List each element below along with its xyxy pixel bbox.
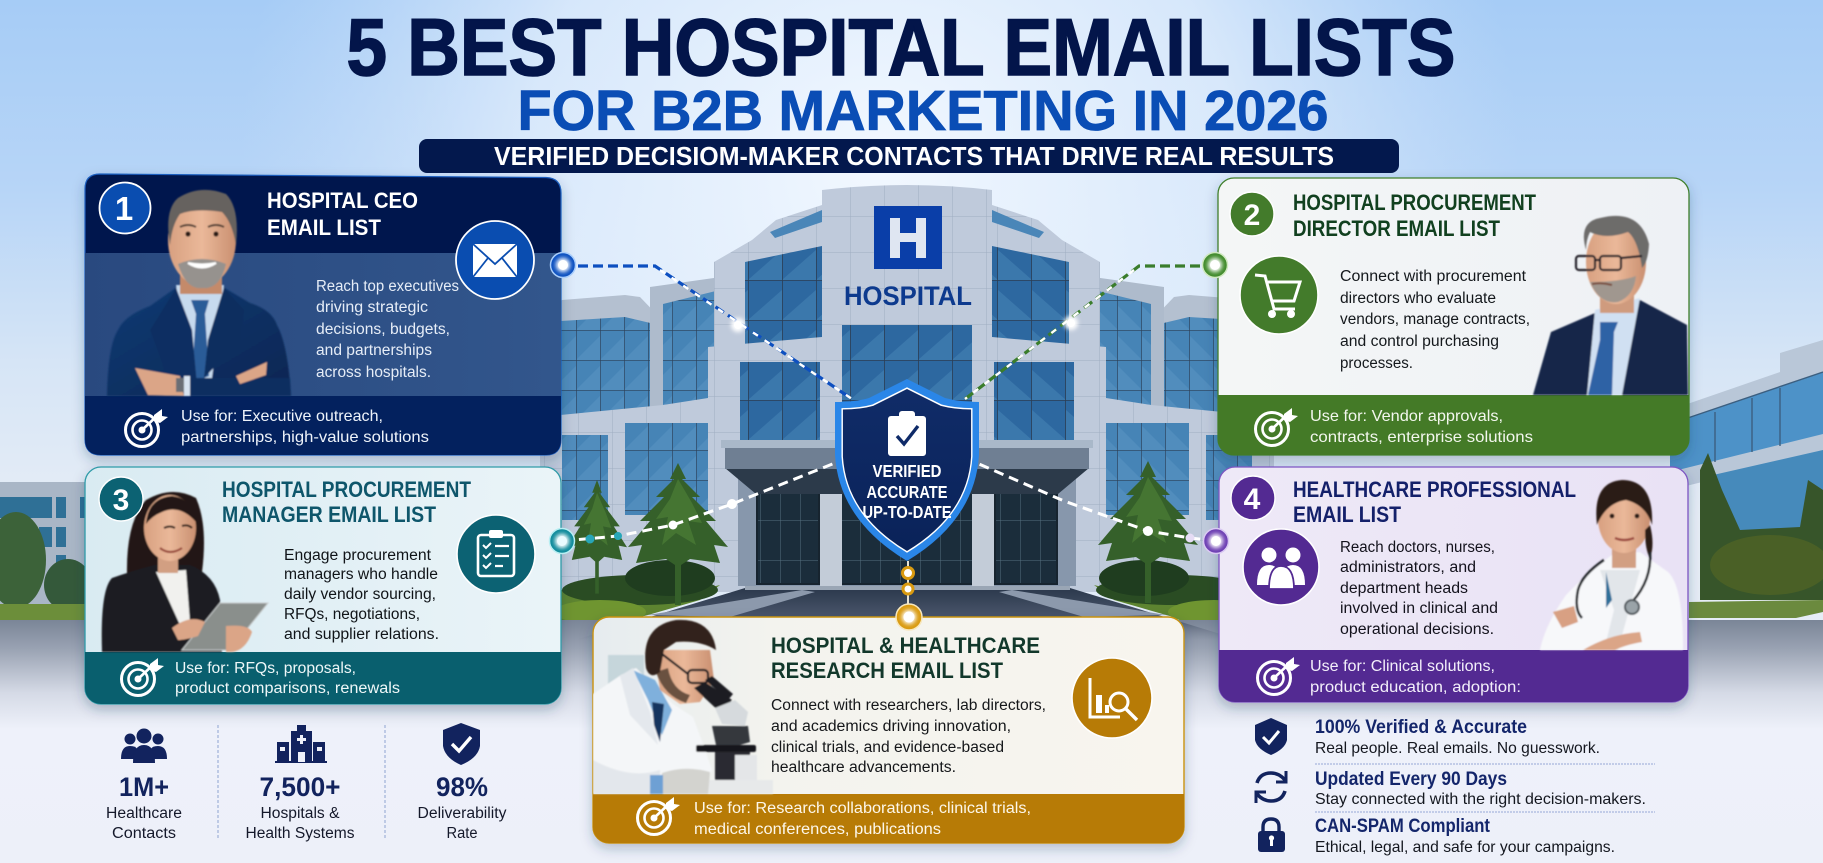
icon: hospital [275, 725, 327, 763]
portrait: CEO [107, 190, 291, 396]
card description: Connect with researchers, lab directors, [771, 697, 1046, 714]
stat: deliverability rate: Deliverability [418, 805, 507, 822]
title line 1: 5 BEST HOSPITAL EMAIL LISTS [346, 3, 1456, 93]
stat: hospitals and health systems: 7,500+ [260, 772, 340, 802]
stat: deliverability rate [418, 723, 507, 842]
hospital H sign [874, 206, 942, 269]
icon: clipboard checklist [457, 515, 535, 593]
connector: shield to card 5 [902, 561, 914, 617]
icon: people group [1243, 529, 1319, 605]
card number 3 [99, 477, 143, 521]
card description: decisions, budgets, [316, 321, 450, 338]
card title [771, 633, 1040, 683]
card title: HEALTHCARE PROFESSIONAL [1293, 477, 1576, 502]
use-for text [175, 660, 400, 697]
title line 2: FOR B2B MARKETING IN 2026 [518, 79, 1328, 143]
background: road and bottom fade [0, 586, 1823, 863]
trust item: updated every 90 days [1256, 768, 1646, 808]
card description: and partnerships [316, 342, 432, 359]
panel: card 3 procurement manager [85, 467, 561, 704]
card number 2: 2 [1244, 199, 1260, 232]
card title [1293, 477, 1576, 527]
card title: HOSPITAL CEO [267, 188, 418, 213]
card description: administrators, and [1340, 559, 1476, 576]
card description: Reach doctors, nurses, [1340, 539, 1495, 556]
card title: HOSPITAL PROCUREMENT [222, 477, 471, 502]
building central tower [822, 185, 992, 592]
use-for text: Use for: Executive outreach, [181, 408, 383, 425]
card description: Engage procurement [284, 547, 432, 564]
background: far left building and trees [0, 482, 92, 622]
card description: processes. [1340, 355, 1413, 372]
card description [1340, 268, 1530, 372]
card title: MANAGER EMAIL LIST [222, 502, 436, 527]
central window wall [842, 325, 972, 440]
icon: shield check [443, 723, 480, 765]
card title: HOSPITAL & HEALTHCARE [771, 633, 1040, 658]
trust item: verified and accurate: 100% Verified & Accurate [1315, 716, 1527, 738]
card description: driving strategic [316, 299, 428, 316]
use-for text: Use for: Vendor approvals, [1310, 408, 1503, 425]
verified shield badge [835, 379, 979, 561]
subtitle banner: VERIFIED DECISIOM-MAKER CONTACTS THAT DRIVE REAL RESULTS [494, 143, 1334, 171]
trust item: updated every 90 days: Updated Every 90 Days [1315, 768, 1507, 790]
stat: deliverability rate: 98% [436, 772, 488, 802]
card title: RESEARCH EMAIL LIST [771, 658, 1004, 683]
trust item: CAN-SPAM compliant: Ethical, legal, and safe for your campaigns. [1315, 839, 1615, 856]
portrait: researcher with microscope [593, 620, 773, 794]
icon: target [122, 658, 164, 696]
card number 1 [100, 182, 150, 234]
use-for text: Use for: RFQs, proposals, [175, 660, 356, 677]
card description: operational decisions. [1340, 621, 1494, 638]
card description: and academics driving innovation, [771, 718, 1011, 735]
stat: deliverability rate: Rate [446, 825, 478, 842]
card description: Reach top executives [316, 278, 459, 295]
stat: healthcare contacts: Healthcare [106, 805, 182, 822]
shield text: ACCURATE [866, 482, 948, 502]
panel: card 1 hospital CEO [85, 174, 561, 456]
panel: card 4 healthcare professional [1219, 467, 1688, 702]
entrance canopy and lobby [721, 440, 1093, 586]
card title: HOSPITAL PROCUREMENT [1293, 190, 1536, 215]
background: far right building and trees [1670, 340, 1823, 618]
card description: and supplier relations. [284, 626, 439, 643]
card description: vendors, manage contracts, [1340, 311, 1530, 328]
trust item: CAN-SPAM compliant [1258, 815, 1615, 856]
node: card 2 [1202, 252, 1228, 278]
shield text [862, 461, 952, 522]
icon: people [121, 728, 167, 763]
trust item: verified and accurate [1255, 716, 1600, 757]
card title [222, 477, 471, 527]
card description: across hospitals. [316, 364, 431, 381]
icon: envelope [456, 221, 534, 299]
stat: hospitals and health systems: Hospitals & [260, 805, 340, 822]
card number 2 [1230, 192, 1274, 236]
node: card 3 [550, 528, 574, 554]
use-for text: contracts, enterprise solutions [1310, 429, 1533, 446]
use-for text: partnerships, high-value solutions [181, 429, 429, 446]
card description: involved in clinical and [1340, 600, 1498, 617]
connector: card 2 to shield [965, 266, 1215, 399]
use-for text: medical conferences, publications [694, 821, 941, 838]
card number 4: 4 [1244, 483, 1261, 516]
connector: card 3 to shield [563, 463, 835, 544]
card description: daily vendor sourcing, [284, 586, 436, 603]
icon: target [638, 797, 680, 834]
stat: hospitals and health systems [246, 725, 355, 842]
icon: chart magnifier [1072, 658, 1152, 738]
card number 4 [1231, 476, 1275, 520]
card description [1340, 539, 1498, 638]
use-for text [181, 408, 429, 446]
stat: healthcare contacts: 1M+ [119, 772, 169, 802]
use-for text [694, 800, 1031, 838]
card number 1: 1 [115, 190, 133, 227]
portrait: procurement director [1533, 216, 1688, 395]
stat: healthcare contacts [106, 728, 182, 842]
card description: directors who evaluate [1340, 290, 1496, 307]
node: card 4 [1204, 528, 1228, 554]
node: card 5 [896, 604, 922, 630]
use-for text: Use for: Research collaborations, clinical trials, [694, 800, 1031, 817]
card title: EMAIL LIST [1293, 502, 1401, 527]
card description: and control purchasing [1340, 333, 1499, 350]
card description: department heads [1340, 580, 1468, 597]
card description: Connect with procurement [1340, 268, 1527, 285]
portrait: procurement manager [102, 492, 268, 652]
card number 3: 3 [113, 484, 129, 517]
connector: card 1 to shield [563, 266, 852, 399]
panel: card 5 research [593, 617, 1184, 844]
stat: hospitals and health systems: Health Systems [246, 825, 355, 842]
icon: padlock [1258, 819, 1285, 852]
card title [267, 188, 418, 240]
hospital name on facade: HOSPITAL [844, 281, 972, 311]
icon: shield check [1255, 718, 1287, 755]
trust item: CAN-SPAM compliant: CAN-SPAM Compliant [1315, 815, 1490, 837]
card title: DIRECTOR EMAIL LIST [1293, 216, 1500, 241]
use-for text [1310, 408, 1533, 446]
icon: clipboard check [888, 411, 926, 456]
icon: target [126, 409, 168, 446]
stat: healthcare contacts: Contacts [112, 825, 176, 842]
card description [284, 547, 439, 643]
shield text: VERIFIED [872, 461, 942, 481]
background: trees [567, 461, 1198, 605]
use-for text: Use for: Clinical solutions, [1310, 658, 1495, 675]
card description [316, 278, 459, 381]
icon: target [1258, 657, 1300, 694]
card description: clinical trials, and evidence-based [771, 739, 1004, 756]
connector: card 4 to shield [979, 464, 1216, 542]
use-for text: product comparisons, renewals [175, 680, 400, 697]
use-for text [1310, 658, 1521, 696]
card title: EMAIL LIST [267, 215, 382, 240]
node: card 1 [550, 252, 576, 278]
panel: card 2 procurement director [1218, 178, 1689, 455]
icon: refresh arrows [1256, 771, 1286, 803]
use-for text: product education, adoption: [1310, 679, 1521, 696]
background: hospital building [540, 185, 1274, 640]
card description: healthcare advancements. [771, 759, 956, 776]
shield text: UP-TO-DATE [862, 502, 952, 522]
trust item: verified and accurate: Real people. Real emails. No guesswork. [1315, 740, 1600, 757]
card description [771, 697, 1046, 776]
icon: target [1256, 408, 1298, 446]
card title [1293, 190, 1536, 241]
card description: managers who handle [284, 566, 438, 583]
icon: shopping cart [1240, 256, 1318, 334]
trust item: updated every 90 days: Stay connected with the right decision-makers. [1315, 791, 1646, 808]
card description: RFQs, negotiations, [284, 606, 420, 623]
portrait: healthcare professional [1540, 480, 1683, 650]
